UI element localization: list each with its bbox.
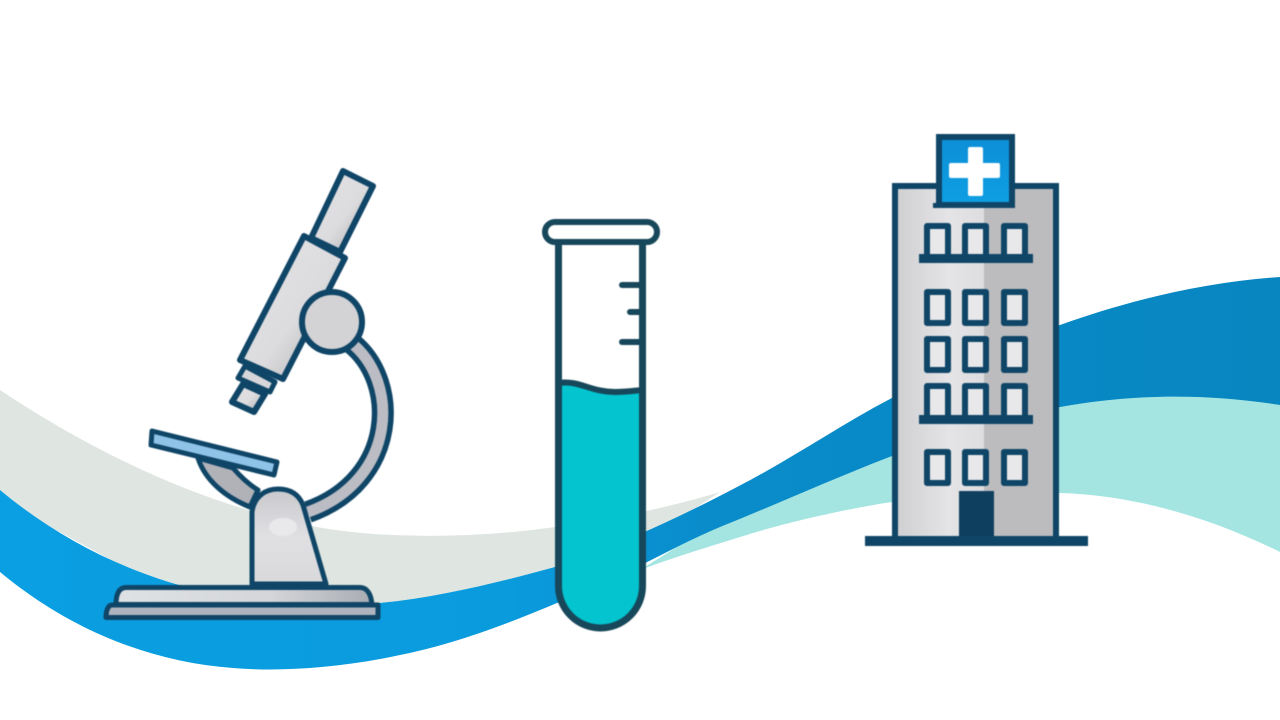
microscope focus knob: [302, 292, 362, 352]
microscope objective lens: [232, 384, 265, 412]
hospital windows: [927, 226, 1025, 483]
hospital wall left: [895, 186, 984, 537]
wave: light teal: [640, 390, 1280, 570]
icon: test tube: [545, 222, 657, 628]
microscope pillar: [252, 489, 326, 584]
icon: hospital building: [865, 137, 1088, 546]
hospital wall right: [984, 186, 1056, 537]
microscope tube: [240, 236, 345, 379]
test tube outline: [558, 243, 642, 628]
microscope nosepiece: [238, 366, 275, 392]
microscope curved arm: [308, 342, 383, 512]
microscope pillar highlight: [269, 518, 297, 536]
hospital door: [959, 491, 994, 537]
microscope slide: [151, 431, 277, 475]
hospital sign: [933, 137, 1012, 208]
test tube measurement ticks: [622, 285, 640, 342]
background waves: [0, 277, 1280, 669]
hospital ledges: [919, 254, 1033, 424]
test tube glass: [558, 243, 642, 628]
test tube liquid: [558, 383, 642, 628]
microscope lower base: [106, 605, 378, 618]
wave: pale grey: [0, 390, 720, 610]
wave: blue: [0, 277, 1280, 669]
test tube rim: [545, 222, 657, 242]
microscope upper base: [116, 588, 372, 604]
hospital ground line: [865, 536, 1088, 546]
medical cross: [949, 147, 1000, 196]
microscope stage arm: [198, 458, 258, 507]
icon: microscope: [106, 171, 383, 618]
hospital outline: [895, 186, 1056, 537]
microscope eyepiece: [311, 171, 373, 252]
